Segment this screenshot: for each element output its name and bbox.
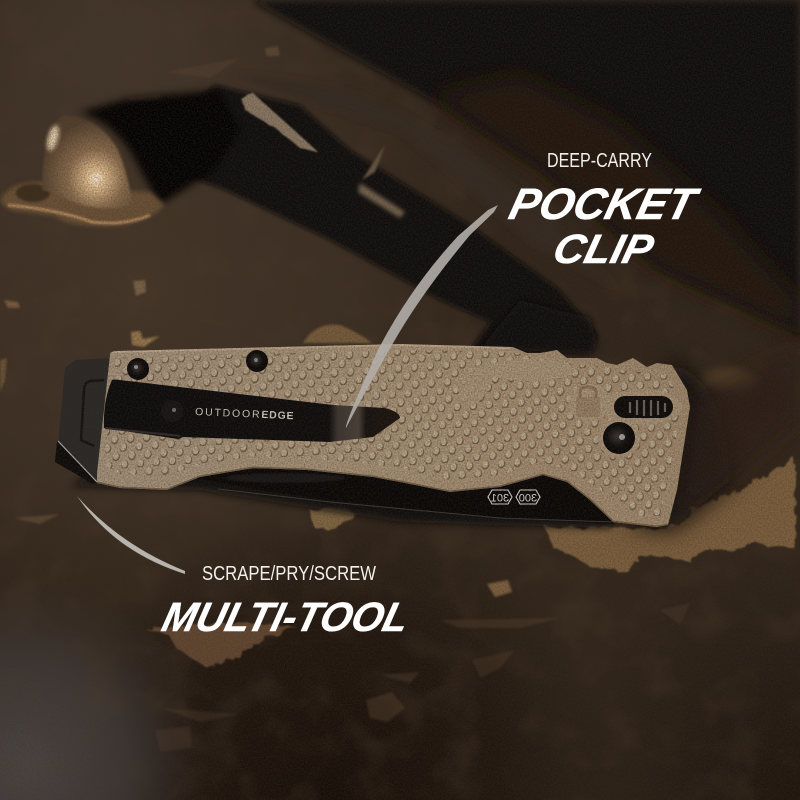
arrow: multi-tool callout line <box>77 496 185 574</box>
arrow: pocket clip callout line <box>346 205 498 428</box>
paint chips and scratches <box>0 46 690 752</box>
brass hinge <box>0 115 165 226</box>
heading: pocket clip: CLIP <box>549 226 659 272</box>
handle screws <box>127 350 635 454</box>
heading: multi-tool: MULTI-TOOL <box>158 594 414 640</box>
clip logo: OUTDOOREDGE <box>195 406 295 422</box>
blade marks: 301 and 300: 300 <box>519 492 537 504</box>
knife shadow <box>70 345 800 530</box>
dark background top right <box>230 0 800 335</box>
dark metal strap behind knife <box>80 85 597 354</box>
multi-tool tip <box>55 358 112 485</box>
blade marks: 301 and 300 <box>488 490 540 504</box>
heading: pocket clip <box>505 181 704 272</box>
icon: padlock <box>576 387 600 417</box>
tan paint wear patch <box>145 368 795 666</box>
heading: pocket clip: POCKET <box>505 181 704 229</box>
pocket clip <box>104 380 400 442</box>
blade marks: 301 and 300: 301 <box>491 492 509 504</box>
knife handle <box>97 344 690 527</box>
lock switch <box>614 396 673 418</box>
label: deep-carry: DEEP-CARRY <box>547 150 652 172</box>
blade <box>195 468 615 524</box>
label: scrape pry screw: SCRAPE/PRY/SCREW <box>202 563 376 585</box>
